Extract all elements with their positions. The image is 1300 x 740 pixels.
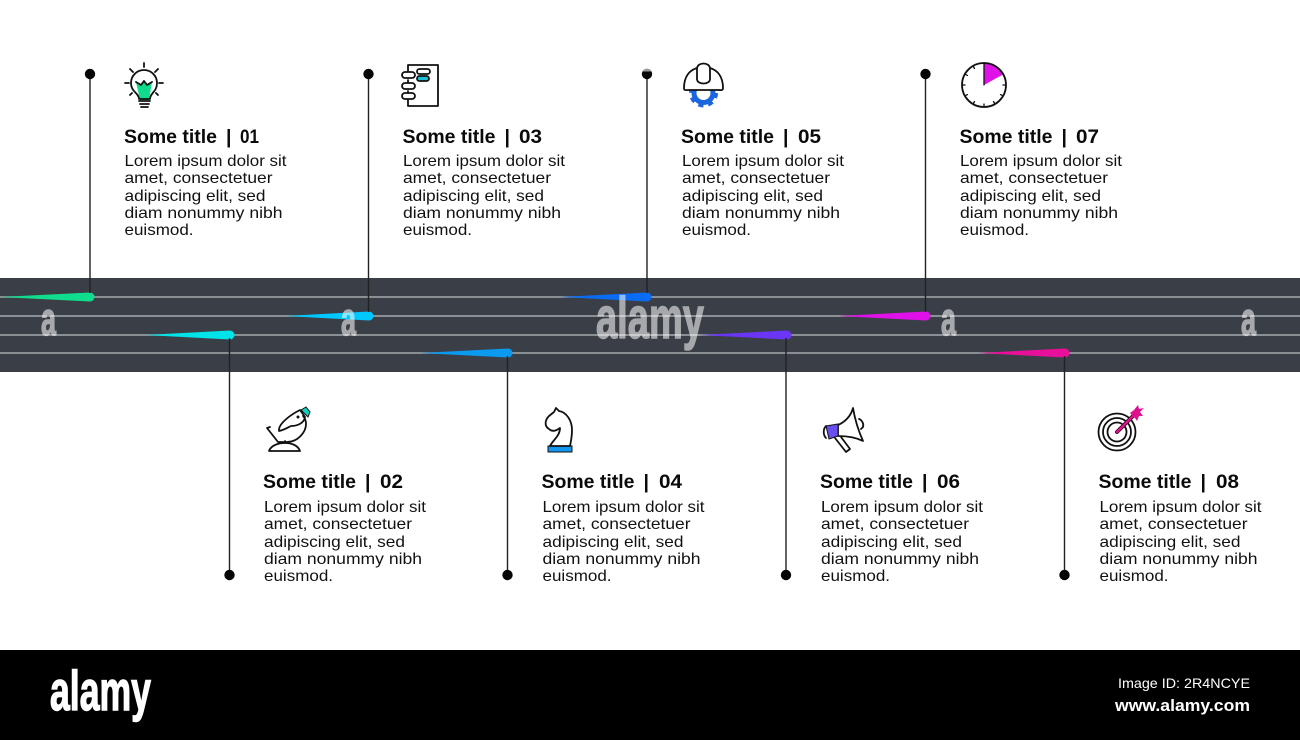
- panel: step 08: [1059, 356, 1262, 585]
- website: www.alamy.com: [1114, 697, 1250, 715]
- text block 08: Lorem ipsum dolor sit: [1100, 499, 1262, 516]
- text block 01: diam nonummy nibh: [124, 205, 282, 222]
- connector 08: [1059, 356, 1070, 580]
- heading 05: |: [783, 126, 788, 148]
- text block 05: diam nonummy nibh: [682, 205, 840, 222]
- text block 07: euismod.: [960, 222, 1029, 239]
- text block 02: adipiscing elit, sed: [264, 534, 405, 551]
- panel: step 01: [85, 63, 287, 293]
- text block 03: diam nonummy nibh: [403, 205, 561, 222]
- text block 02: euismod.: [264, 568, 333, 585]
- heading 02: |: [365, 471, 370, 493]
- panel: step 07: [920, 63, 1123, 312]
- heading 01: Some title: [124, 126, 217, 148]
- heading 02: 02: [380, 471, 403, 493]
- heading 06: Some title: [820, 471, 913, 493]
- text block 03: Lorem ipsum dolor sit: [403, 153, 566, 170]
- text block 06: amet, consectetuer: [821, 516, 970, 533]
- heading 01: [124, 126, 259, 148]
- connector 07: [920, 69, 931, 312]
- text block 06: diam nonummy nibh: [821, 551, 979, 568]
- icon: helmet and gear: [684, 64, 723, 106]
- heading 07: 07: [1076, 126, 1099, 148]
- panel: step 05: [642, 64, 845, 293]
- panel: step 03: [363, 65, 566, 312]
- text block 05: euismod.: [682, 222, 751, 239]
- text block 08: amet, consectetuer: [1100, 516, 1248, 533]
- icon: microscope: [267, 407, 310, 451]
- watermark logo: alamy: [596, 286, 704, 351]
- text block 08: [1100, 499, 1262, 585]
- heading 06: [820, 471, 960, 493]
- text block 02: amet, consectetuer: [264, 516, 413, 533]
- connector 04: [502, 356, 513, 580]
- text block 04: [542, 499, 705, 585]
- icon: notebook: [402, 65, 438, 106]
- text block 01: euismod.: [124, 222, 194, 239]
- text block 05: Lorem ipsum dolor sit: [682, 153, 845, 170]
- comet marker 02: [145, 330, 234, 340]
- timeline band: [0, 278, 1300, 372]
- connector 03: [363, 69, 374, 312]
- watermark letters on band: [41, 293, 1256, 345]
- text block 04: euismod.: [542, 568, 612, 585]
- footer logo: alamy: [50, 659, 151, 722]
- icon: light bulb: [125, 63, 163, 107]
- text block 02: diam nonummy nibh: [264, 551, 422, 568]
- text block 01: amet, consectetuer: [124, 170, 273, 187]
- icon: target with arrow: [1098, 405, 1144, 450]
- comet marker 04: [420, 348, 512, 358]
- heading 05: Some title: [681, 126, 774, 148]
- text block 04: adipiscing elit, sed: [542, 534, 684, 551]
- comet marker 06: [700, 330, 792, 340]
- text block 06: [821, 499, 984, 585]
- panel: step 06: [781, 338, 984, 585]
- text block 06: Lorem ipsum dolor sit: [821, 499, 984, 516]
- heading 08: |: [1200, 471, 1206, 493]
- heading 04: 04: [659, 471, 682, 493]
- heading 03: 03: [519, 126, 542, 148]
- text block 02: Lorem ipsum dolor sit: [264, 499, 427, 516]
- text block 04: Lorem ipsum dolor sit: [542, 499, 705, 516]
- text block 07: adipiscing elit, sed: [960, 188, 1101, 205]
- text block 01: Lorem ipsum dolor sit: [124, 153, 287, 170]
- heading 07: |: [1062, 126, 1067, 148]
- text block 01: [124, 153, 287, 239]
- heading 03: |: [504, 126, 510, 148]
- heading 01: 01: [240, 126, 259, 148]
- heading 07: [960, 126, 1099, 148]
- heading 08: [1098, 471, 1239, 493]
- text block 06: euismod.: [821, 568, 890, 585]
- text block 08: adipiscing elit, sed: [1100, 534, 1240, 551]
- heading 02: Some title: [263, 471, 356, 493]
- heading 04: Some title: [542, 471, 635, 493]
- text block 04: diam nonummy nibh: [542, 551, 700, 568]
- heading 01: |: [226, 126, 231, 148]
- icon: chess knight: [546, 408, 572, 452]
- icon: clock with pie wedge: [962, 63, 1006, 107]
- comet marker 08: [978, 348, 1070, 358]
- watermark letters on band: a: [941, 293, 956, 345]
- heading 06: 06: [937, 471, 960, 493]
- heading 04: |: [644, 471, 649, 493]
- heading 06: |: [922, 471, 927, 493]
- text block 03: adipiscing elit, sed: [403, 188, 544, 205]
- text block 05: [682, 153, 845, 239]
- watermark letters on band: a: [1241, 293, 1256, 345]
- text block 08: euismod.: [1100, 568, 1168, 585]
- heading 07: Some title: [960, 126, 1053, 148]
- panel: step 04: [502, 356, 705, 585]
- connector 05: [642, 69, 652, 293]
- text block 02: [264, 499, 427, 585]
- heading 05: 05: [798, 126, 821, 148]
- comet marker 05: [560, 292, 652, 302]
- comet marker 03: [285, 312, 374, 320]
- text block 03: [403, 153, 566, 239]
- comet marker 01: [0, 292, 94, 302]
- heading 02: [263, 471, 403, 493]
- text block 08: diam nonummy nibh: [1100, 551, 1258, 568]
- connector 06: [781, 338, 791, 580]
- comet marker 07: [838, 312, 931, 320]
- text block 01: adipiscing elit, sed: [124, 188, 266, 205]
- heading 03: [402, 126, 542, 148]
- text block 03: amet, consectetuer: [403, 170, 552, 187]
- text block 03: euismod.: [403, 222, 472, 239]
- connector 01: [85, 69, 95, 293]
- text block 07: diam nonummy nibh: [960, 205, 1118, 222]
- icon: megaphone: [824, 408, 863, 452]
- text block 04: amet, consectetuer: [542, 516, 691, 533]
- text block 05: amet, consectetuer: [682, 170, 831, 187]
- watermark letters on band: a: [341, 293, 356, 345]
- heading 05: [681, 126, 821, 148]
- panel: step 02: [224, 338, 427, 585]
- heading 08: 08: [1216, 471, 1239, 493]
- footer bar: [0, 650, 1300, 740]
- heading 03: Some title: [402, 126, 496, 148]
- text block 07: Lorem ipsum dolor sit: [960, 153, 1123, 170]
- text block 07: [960, 153, 1123, 239]
- image id: Image ID: 2R4NCYE: [1118, 675, 1250, 691]
- text block 06: adipiscing elit, sed: [821, 534, 962, 551]
- connector 02: [224, 338, 235, 580]
- watermark letters on band: a: [41, 293, 56, 345]
- heading 04: [542, 471, 682, 493]
- heading 08: Some title: [1098, 471, 1192, 493]
- text block 05: adipiscing elit, sed: [682, 188, 823, 205]
- text block 07: amet, consectetuer: [960, 170, 1109, 187]
